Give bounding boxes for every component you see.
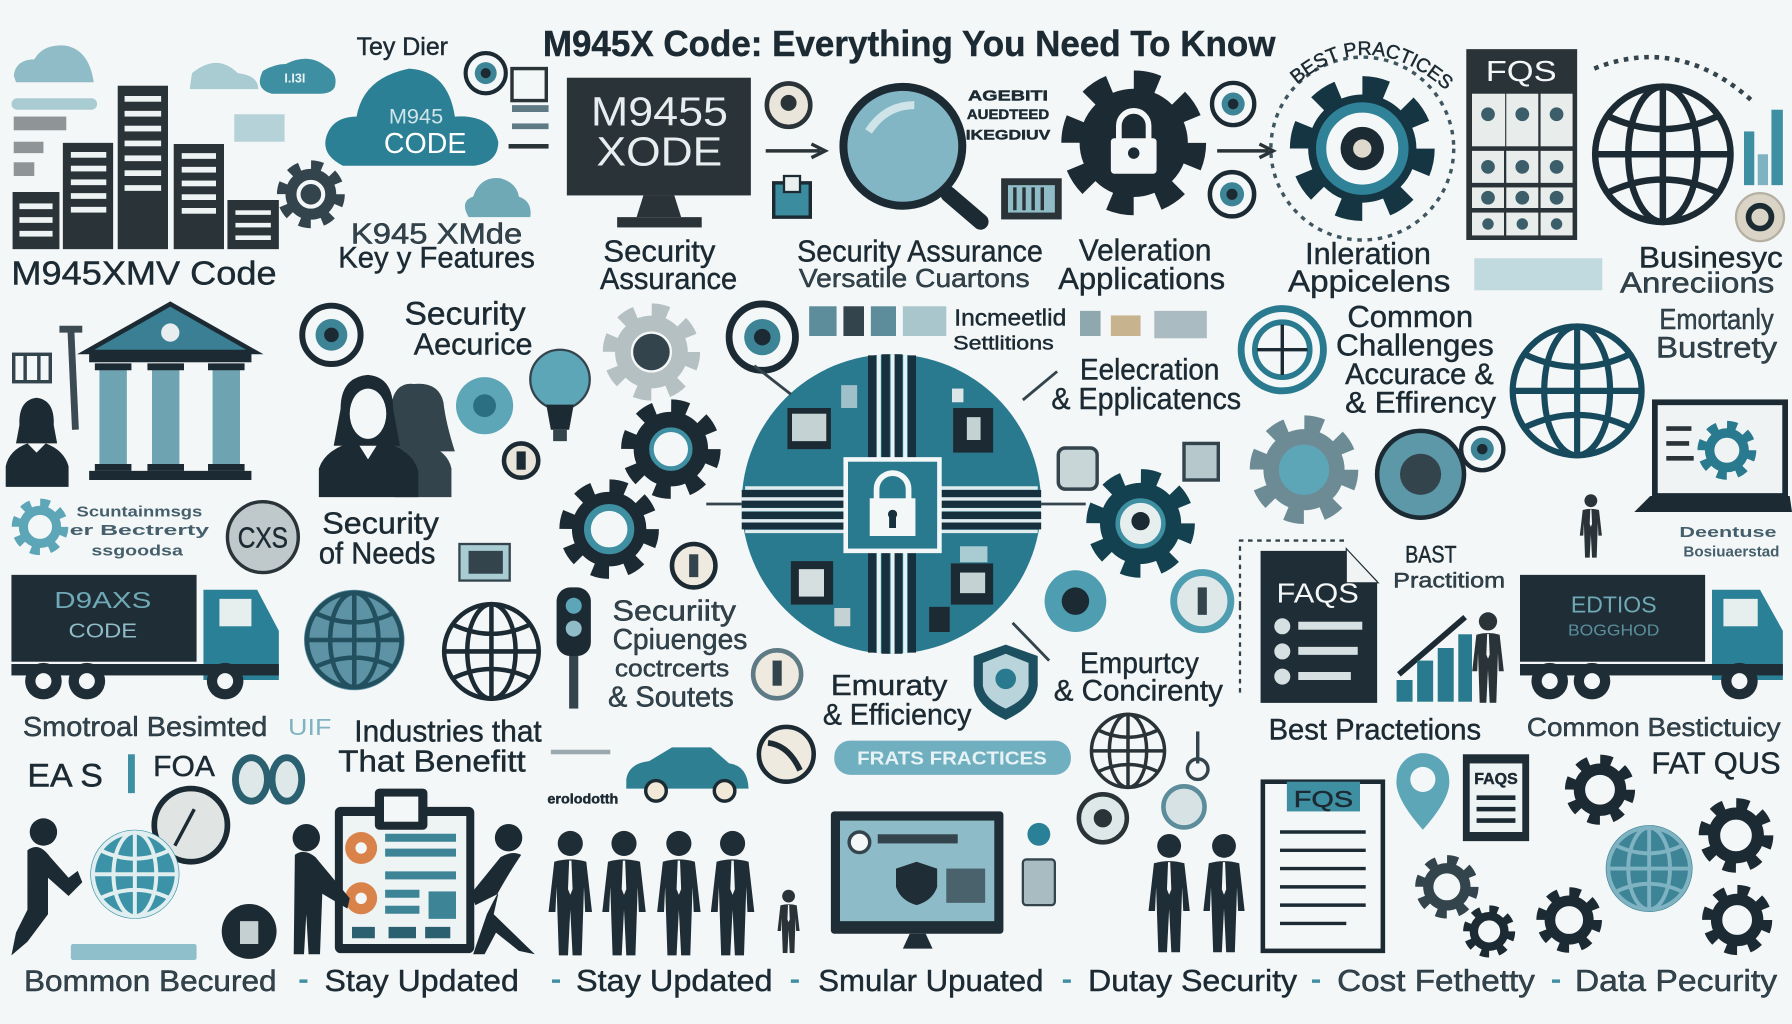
illustration: city buildings	[13, 86, 285, 249]
label: Eelecration Epplicatencs: Eelecration	[1080, 353, 1219, 386]
label: Veleration Applications: Applications	[1058, 261, 1225, 296]
illustration: monitor M9455 XODE: XODE	[597, 129, 722, 175]
badge: CXS	[227, 502, 298, 573]
illustration: truck right: BOGGHOD	[1568, 622, 1659, 639]
label: Common Challenges: Common	[1347, 299, 1473, 334]
label: EA S FOA: FOA	[153, 751, 215, 783]
label: Security Assurance	[600, 234, 737, 296]
small icon row	[809, 306, 946, 336]
title: M945X Code: Everything You Need To Know	[543, 23, 1276, 64]
label: Empurtcy Concirenty: & Concirenty	[1054, 675, 1223, 708]
illustration: truck right	[1520, 575, 1783, 699]
icon: twin rings	[235, 758, 302, 801]
label: Security Assurance: Assurance	[600, 261, 737, 296]
label: Security of Needs: Security	[322, 506, 439, 541]
label: Eelecration Epplicatencs: & Epplicatencs	[1051, 381, 1241, 416]
label: Emortanly Bustrety	[1656, 304, 1777, 365]
illustration: truck right: EDTIOS	[1571, 592, 1657, 618]
figure: running person	[11, 818, 82, 955]
label: Empurtcy Concirenty: Empurtcy	[1080, 647, 1199, 680]
icon: dark city badge	[222, 904, 277, 959]
label: Veleration Applications: Veleration	[1079, 233, 1211, 268]
arrow	[766, 144, 825, 158]
icon: teal globe small	[90, 830, 179, 919]
small text block: security: er Bectrerty	[70, 523, 210, 539]
label: Empurtcy Concirenty	[1054, 647, 1223, 708]
panel: FQS grid: FQS	[1486, 56, 1557, 88]
icon: pale gear	[611, 312, 692, 392]
dashed connector	[1240, 541, 1349, 697]
illustration: monitor M9455 XODE: M9455	[591, 89, 728, 135]
icon: small target	[466, 53, 506, 93]
label: Security Assurance Versatile: Security Assurance	[797, 234, 1043, 269]
label: Best Practetions: Best Practetions	[1269, 713, 1481, 746]
panel: FAQs document	[1261, 549, 1378, 703]
small tag cloud	[260, 59, 336, 94]
icon: light bulb	[530, 350, 590, 441]
label: UIF tag: UIF	[288, 714, 331, 740]
label: Emuraty Efficiency	[823, 670, 972, 732]
icon: globe pin	[1091, 714, 1208, 787]
icon: globe right	[1513, 326, 1642, 455]
figures: four businessmen	[549, 831, 754, 955]
small text block right	[1679, 525, 1779, 561]
label: Security of Needs	[319, 506, 439, 570]
small text block: AUEDTEED	[967, 107, 1049, 122]
cloud: small teal	[465, 178, 531, 217]
label: Incmeetlid Settlitions: Settlitions	[953, 333, 1054, 355]
footer labels: Stay Updated	[325, 963, 519, 998]
icon: oval badge 0	[672, 544, 715, 587]
illustration: clouds top left	[11, 45, 258, 110]
illustration: truck left	[11, 575, 279, 699]
small card icon	[459, 544, 510, 581]
icon: globe top right	[1595, 87, 1731, 222]
icon: small gear	[283, 166, 339, 222]
label: FAT QUS: FAT QUS	[1651, 746, 1781, 781]
label: Common Challenges: & Effirency	[1345, 387, 1496, 420]
footer labels: Smular Upuated	[818, 963, 1043, 998]
icon: gear right of circle	[1096, 478, 1186, 568]
icon: target gear with best practices ring	[1269, 41, 1456, 242]
panel: FQS grid	[1466, 49, 1577, 240]
label: Inleration Appicelens: Appicelens	[1288, 263, 1450, 298]
figure: presenter right	[471, 824, 535, 954]
label: Security Aecurice: Aecurice	[414, 326, 533, 361]
label: Emortanly Bustrety: Bustrety	[1656, 332, 1777, 365]
small text block: AGEBITI	[968, 89, 1048, 105]
label: Common Challenges	[1336, 299, 1496, 420]
label: Security Challenges: Cpiuenges	[613, 624, 747, 656]
label: key features: Key y Features	[338, 241, 535, 274]
label: Security Challenges	[608, 596, 747, 713]
icon: gauge badge	[302, 306, 361, 364]
label: key features: K945 XMde	[351, 218, 522, 250]
panel: small barcode card	[1001, 178, 1062, 219]
illustration: truck left: D9AXS	[54, 587, 151, 613]
icons: gears bottom right	[1421, 761, 1767, 953]
figure: small person	[778, 890, 800, 953]
label: Smotroal Besimted: Smotroal Besimted	[23, 711, 267, 742]
label: Eelecration Epplicatencs	[1051, 353, 1241, 416]
panel: FAQS small document	[1463, 754, 1529, 841]
chart: growth bars with person	[1397, 612, 1504, 703]
small blurred icons near cloud	[509, 69, 549, 149]
small text block: left of car: erolodotth	[547, 791, 618, 806]
label: Common Challenges: Accurace &	[1345, 358, 1494, 391]
icon: teal gear small	[17, 503, 63, 550]
illustration: monitor M9455 XODE	[567, 78, 751, 227]
icon: teal bubble	[456, 377, 513, 434]
label: BAST Practitiom: BAST	[1405, 541, 1457, 568]
icon: ring badge	[1241, 309, 1323, 391]
icon: gauge dial	[759, 727, 814, 782]
badge: CXS: CXS	[238, 522, 288, 554]
cloud: M945 code: M945	[389, 103, 443, 128]
footer labels	[24, 963, 1778, 998]
circuit icons	[787, 385, 993, 632]
label: Industries That Benefit: Industries that	[354, 714, 542, 749]
teal bar	[71, 944, 197, 960]
arrow	[1217, 144, 1273, 158]
panel: FQS document: FQS	[1294, 786, 1353, 812]
label: EA S FOA	[27, 751, 215, 793]
cloud: M945 code	[325, 69, 498, 166]
dotted arc	[1594, 57, 1754, 103]
small tag cloud: I.I3I	[284, 71, 305, 85]
illustration: laptop	[1634, 402, 1792, 512]
icon: gears left of circle	[568, 408, 712, 570]
small text block right: Deentuse	[1679, 525, 1777, 541]
chart: small bars	[1744, 110, 1783, 185]
label: Security Assurance Versatile: Versatile Cuartons	[799, 263, 1030, 293]
small device	[1023, 823, 1055, 905]
footer labels: Data Pecurity	[1575, 963, 1778, 998]
icon: bulb badge	[767, 83, 810, 127]
label: key features	[338, 218, 535, 274]
small text block: security: ssgoodsa	[91, 543, 184, 559]
label: Emortanly Bustrety: Emortanly	[1659, 304, 1774, 336]
icon: clock	[154, 789, 227, 862]
label: Inleration Appicelens: Inleration	[1305, 236, 1431, 271]
small text block: left of car	[547, 750, 618, 806]
small text block	[966, 89, 1051, 142]
icon: target gear with best practices ring: BEST PRACTICES	[1289, 41, 1453, 88]
label: Business Apreciions: Businesyc	[1639, 241, 1783, 274]
icon: badge	[729, 304, 795, 370]
illustration: bank building	[86, 304, 255, 480]
figure: presenter left	[293, 824, 350, 954]
icon: shield	[974, 645, 1038, 720]
illustration: clipboard	[335, 789, 474, 953]
label: Security Challenges: & Soutets	[608, 681, 734, 713]
label: Business Apreciions: Anreciions	[1620, 268, 1774, 300]
small text block: security	[70, 505, 210, 559]
connector lines from circle	[706, 366, 1086, 661]
label: Industries That Benefit	[338, 714, 542, 778]
icons: pins middle	[1079, 786, 1205, 842]
label: Business Apreciions	[1620, 241, 1783, 300]
small text block: IKEGDIUV	[966, 127, 1051, 142]
icon: magnifier	[843, 87, 981, 222]
label: Veleration Applications	[1058, 233, 1225, 296]
panel: FQS document	[1263, 782, 1383, 951]
icon: small tower	[14, 354, 50, 382]
label: BAST Practitiom	[1393, 541, 1505, 592]
icon: hammer	[59, 329, 82, 430]
footer labels: Stay Updated	[576, 963, 773, 998]
label: Security Challenges: coctrcerts	[615, 656, 729, 683]
label: Industries That Benefit: That Benefitt	[338, 743, 526, 778]
label: Emuraty Efficiency: & Efficiency	[823, 699, 972, 732]
label: BAST Practitiom: Practitiom	[1393, 567, 1505, 592]
icon: oval badge	[504, 443, 538, 478]
icon: map pin	[1396, 753, 1449, 830]
label: Security Assurance Versatile	[797, 234, 1043, 293]
pill: FRATS FRACTICES	[834, 741, 1071, 775]
pill: FRATS FRACTICES: FRATS FRACTICES	[857, 748, 1047, 769]
icons: teal bubbles	[1045, 570, 1231, 632]
label: Security Assurance: Security	[603, 234, 716, 269]
illustration: monitor bottom	[831, 811, 1003, 949]
small text block right: Bosiuaerstad	[1683, 545, 1779, 561]
figures: two women	[319, 375, 455, 497]
icon: teal disc	[1377, 431, 1464, 518]
label: Common Challenges: Challenges	[1336, 327, 1494, 362]
icon: small bag	[774, 176, 810, 217]
icon: small badge	[1461, 428, 1503, 470]
icon: teal globe bottom right	[1606, 825, 1693, 912]
central circle: lock and circuit	[742, 354, 1041, 654]
panel: FAQS small document: FAQS	[1474, 771, 1518, 788]
label: Security Aecurice: Security	[405, 296, 526, 332]
small text block: security: Scuntainmsgs	[77, 505, 202, 521]
label: EA S FOA: EA S	[27, 757, 103, 793]
icon: traffic light	[557, 587, 591, 709]
icon: badges	[1210, 83, 1254, 216]
figure: small businessman	[1580, 494, 1602, 558]
icons near right of circle	[1058, 443, 1218, 489]
icon: teal globe	[304, 590, 405, 690]
icon: hex badge	[1736, 193, 1784, 241]
label: Tey Dier: Tey Dier	[357, 33, 448, 61]
label: Security Aecurice	[405, 296, 533, 361]
label: Emuraty Efficiency: Emuraty	[831, 670, 948, 702]
illustration: truck left: CODE	[69, 620, 137, 643]
small tags right of heading	[1080, 311, 1207, 338]
figure: woman	[6, 398, 69, 487]
footer labels: Cost Fethetty	[1337, 963, 1535, 998]
label: Incmeetlid Settlitions	[953, 305, 1066, 355]
label: Common Bestictuicy: Common Bestictuicy	[1527, 712, 1781, 742]
label: Security Challenges: Securiity	[613, 596, 737, 628]
icon: pale teal gear	[1259, 425, 1349, 515]
panel: FAQs document: FAQS	[1277, 577, 1359, 608]
footer labels: Dutay Security	[1088, 963, 1298, 998]
blurred teal strip	[1474, 258, 1602, 290]
label: Inleration Appicelens	[1288, 236, 1450, 298]
figures: two men	[1149, 834, 1245, 952]
label: Incmeetlid Settlitions: Incmeetlid	[954, 305, 1066, 331]
footer labels: Bommon Becured	[24, 965, 277, 998]
label: Security of Needs: of Needs	[319, 535, 435, 570]
icon: lock gear	[1074, 83, 1194, 203]
icon: dark globe	[444, 604, 539, 699]
cloud: M945 code: CODE	[384, 128, 466, 160]
icon: pale badge	[753, 650, 801, 698]
illustration: car	[626, 747, 749, 801]
label: M945XMV Code: M945XMV Code	[11, 256, 277, 293]
